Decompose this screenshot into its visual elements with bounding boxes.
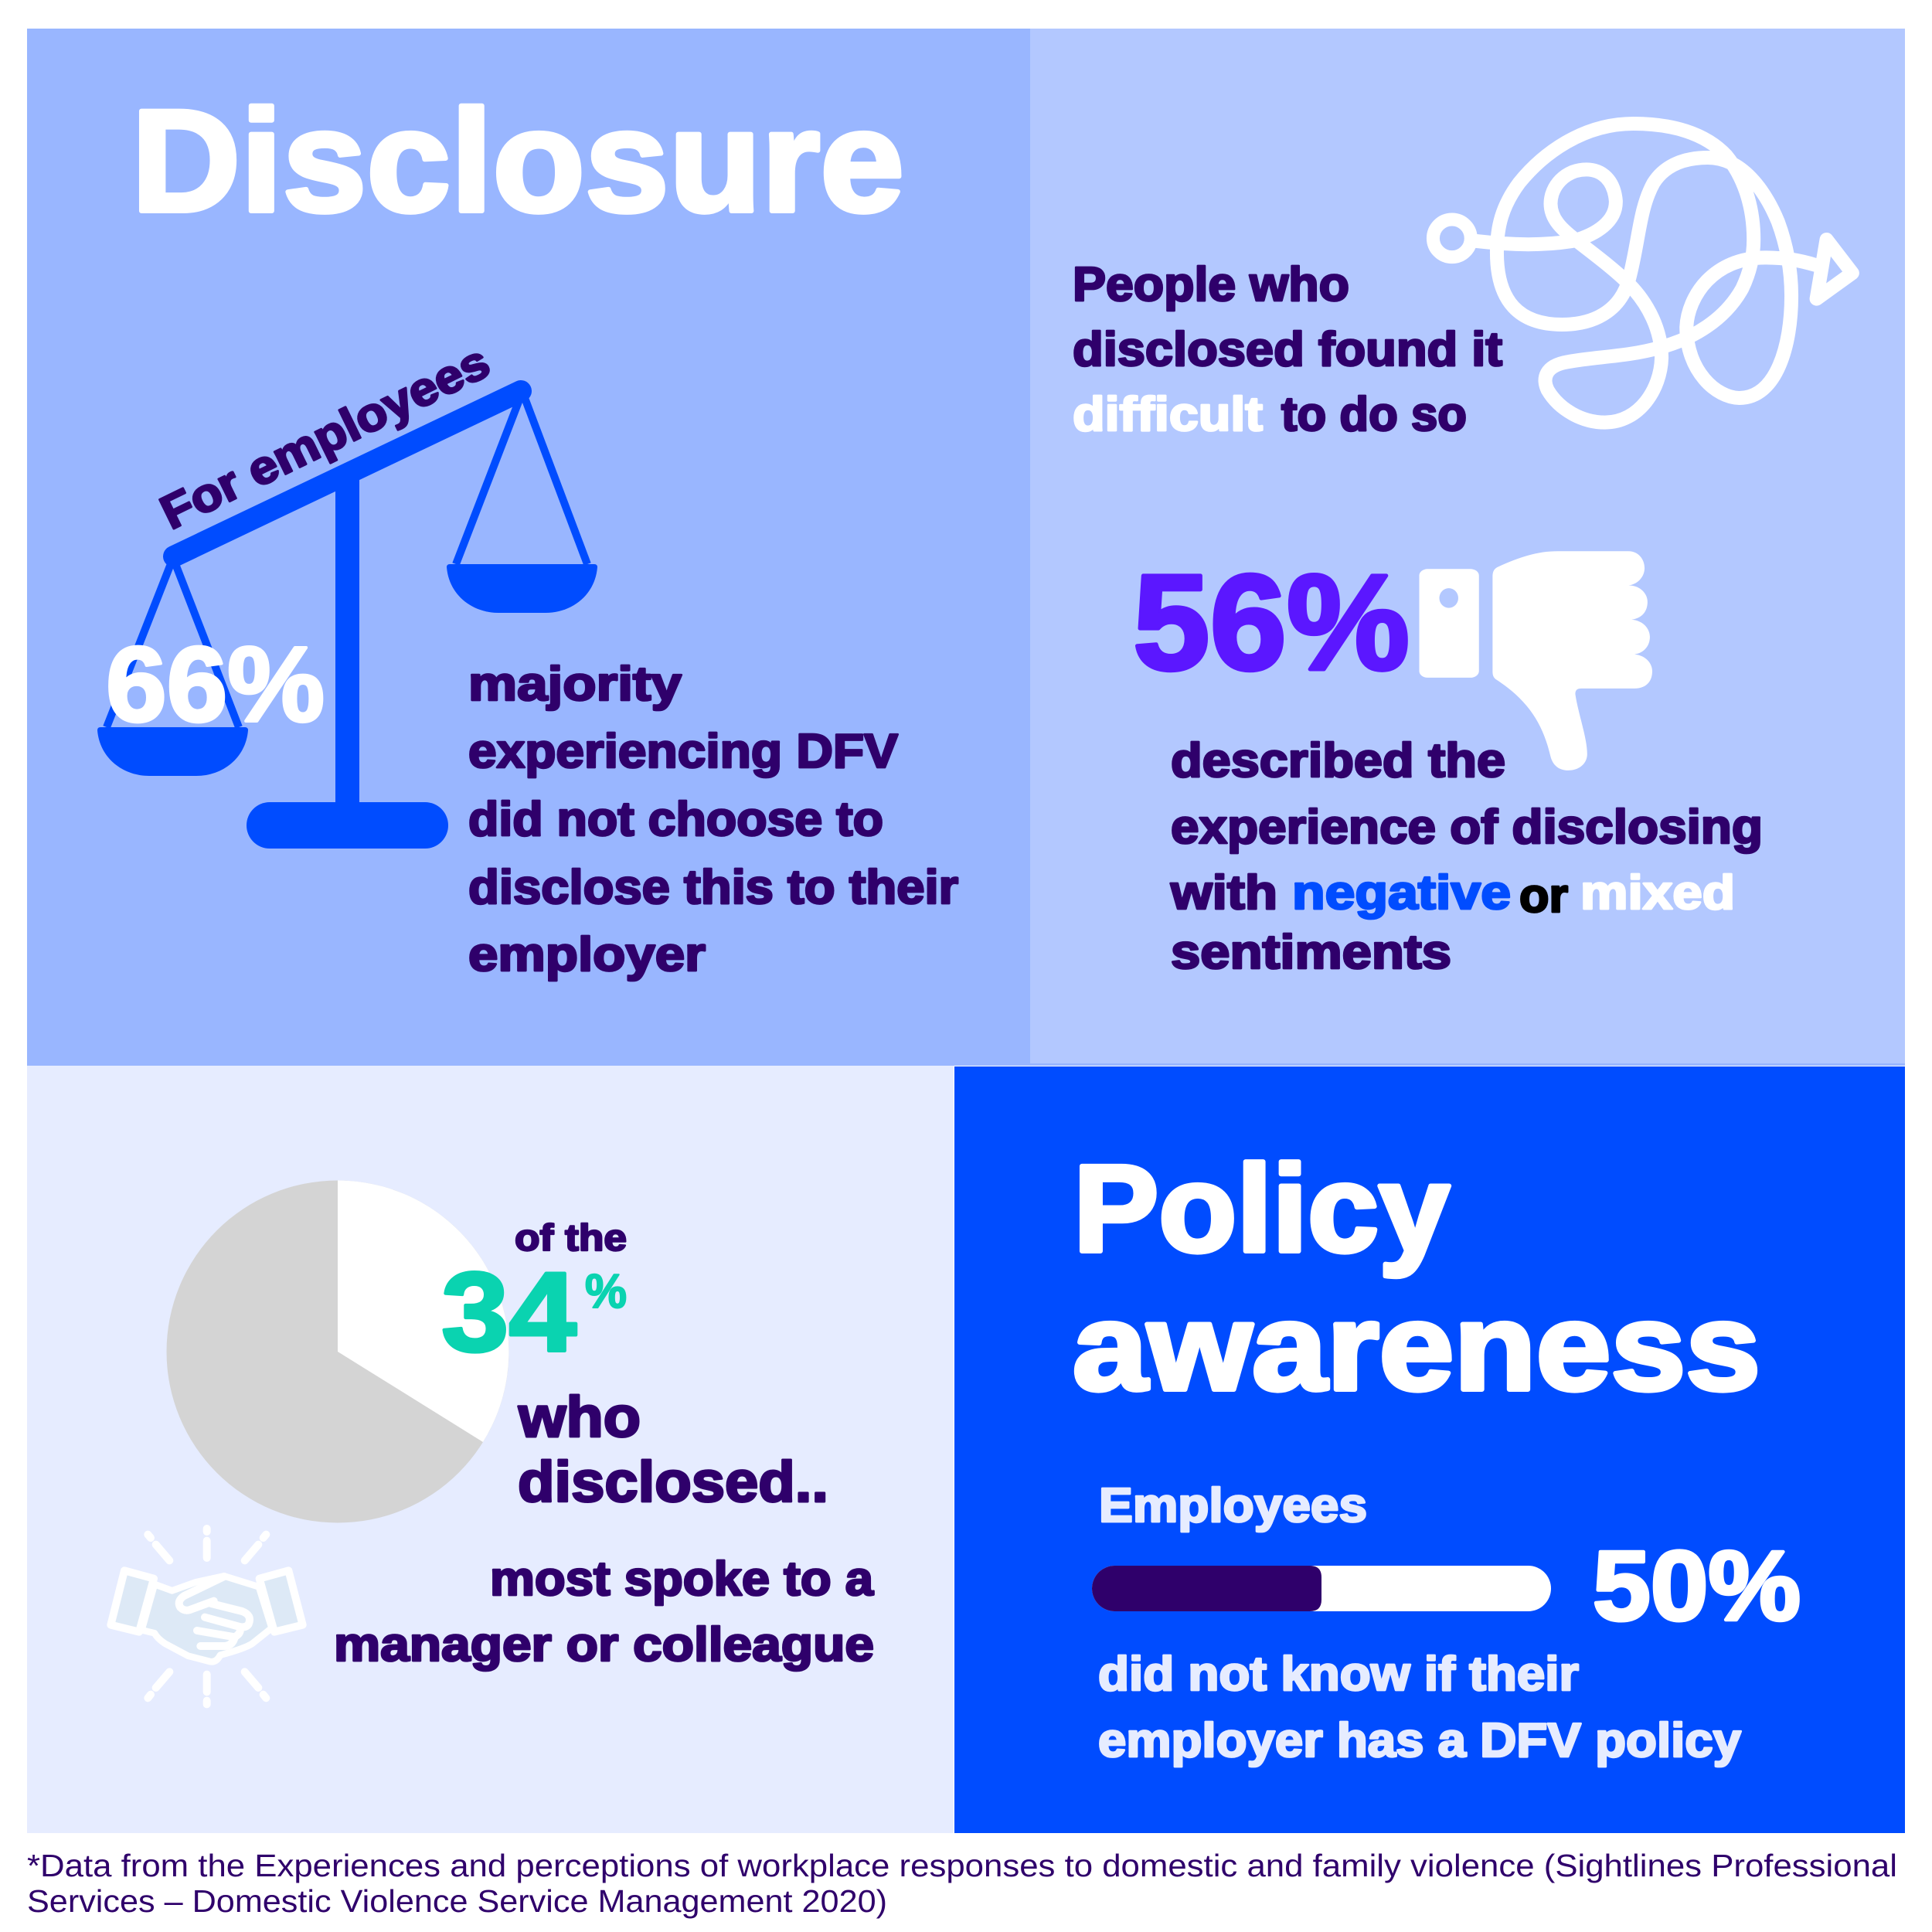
text: people found it difficult	[1073, 258, 1502, 441]
text: majority did not disclose: disclose this to their	[468, 861, 958, 914]
text: majority did not disclose: experiencing DFV	[468, 725, 898, 778]
label: For employees: For employees	[152, 335, 498, 539]
statistic: 66%: 66%	[106, 625, 325, 744]
panel: disclosure	[27, 29, 1905, 1066]
panel background: disclosure	[27, 29, 1905, 1066]
text: most spoke to a manager: most spoke to a	[490, 1553, 874, 1606]
text: who disclosed	[518, 1385, 828, 1514]
text: did not know policy: employer has a DFV policy	[1098, 1714, 1742, 1767]
icon: thumbs down	[1419, 551, 1652, 770]
panel: who people disclosed to	[27, 1066, 954, 1833]
text: negative or mixed sentiments	[1170, 734, 1763, 979]
text: negative or mixed sentiments: sentiments	[1171, 926, 1451, 979]
text: negative or mixed sentiments: experience of disclosing	[1171, 801, 1763, 854]
statistic: 56%: 56%	[1133, 547, 1410, 699]
heading: Policy awareness: Policy	[1073, 1139, 1450, 1277]
text: people found it difficult: People who	[1073, 258, 1349, 311]
label: Employees: Employees	[1099, 1479, 1367, 1532]
panel background: who disclosed	[27, 1066, 954, 1833]
text: of the: of the	[515, 1218, 627, 1259]
icon: handshake	[111, 1529, 303, 1704]
text: negative or mixed sentiments: negative	[1292, 866, 1511, 920]
panel background: difficulty	[1030, 29, 1905, 1063]
icon: balance scales	[97, 391, 597, 849]
heading: Disclosure: Disclosure	[131, 80, 904, 242]
chart: pie 34 percent	[167, 1181, 509, 1522]
panel: policy awareness	[954, 1066, 1905, 1833]
text: negative or mixed sentiments: mixed	[1580, 866, 1735, 920]
footnote: data source: *Data from the Experiences and perceptions of workplace responses to domestic and family violence (Sightlines Professional	[27, 1848, 1897, 1883]
footnote: data source	[27, 1848, 1897, 1919]
text: most spoke to a manager: manager or colleague	[334, 1618, 874, 1672]
text: people found it difficult: to do so	[1281, 388, 1467, 441]
text: negative or mixed sentiments: or	[1519, 869, 1568, 923]
heading: Policy awareness	[1073, 1139, 1760, 1416]
text: most spoke to a manager	[334, 1553, 874, 1672]
text: people found it difficult: difficult	[1073, 388, 1263, 441]
panel background: policy	[954, 1066, 1905, 1833]
text: negative or mixed sentiments: described the	[1171, 734, 1505, 787]
panel: difficulty disclosing	[1030, 29, 1905, 1063]
chart: progress bar 50 percent	[1092, 1566, 1551, 1611]
text: who disclosed: who	[518, 1385, 641, 1449]
text: majority did not disclose	[468, 658, 958, 981]
text: majority did not disclose: did not choose to	[468, 793, 883, 846]
text: negative or mixed sentiments: with	[1170, 866, 1277, 920]
statistic: 34%: 34	[441, 1249, 577, 1375]
statistic: 50%: 50%	[1593, 1531, 1801, 1641]
text: who disclosed: disclosed..	[518, 1450, 828, 1514]
statistic: 34%: %	[585, 1265, 627, 1318]
heading: Policy awareness: awareness	[1073, 1277, 1760, 1416]
statistic: 34%	[441, 1249, 627, 1375]
text: majority did not disclose: majority	[468, 658, 682, 711]
text: did not know policy: did not know if their	[1098, 1648, 1579, 1701]
icon: tangled line with arrow	[1433, 124, 1852, 423]
text: majority did not disclose: employer	[468, 928, 706, 981]
text: people found it difficult: disclosed found it	[1073, 323, 1502, 376]
text: did not know policy	[1098, 1648, 1742, 1767]
footnote: data source: Services – Domestic Violence Service Management 2020)	[27, 1883, 887, 1919]
